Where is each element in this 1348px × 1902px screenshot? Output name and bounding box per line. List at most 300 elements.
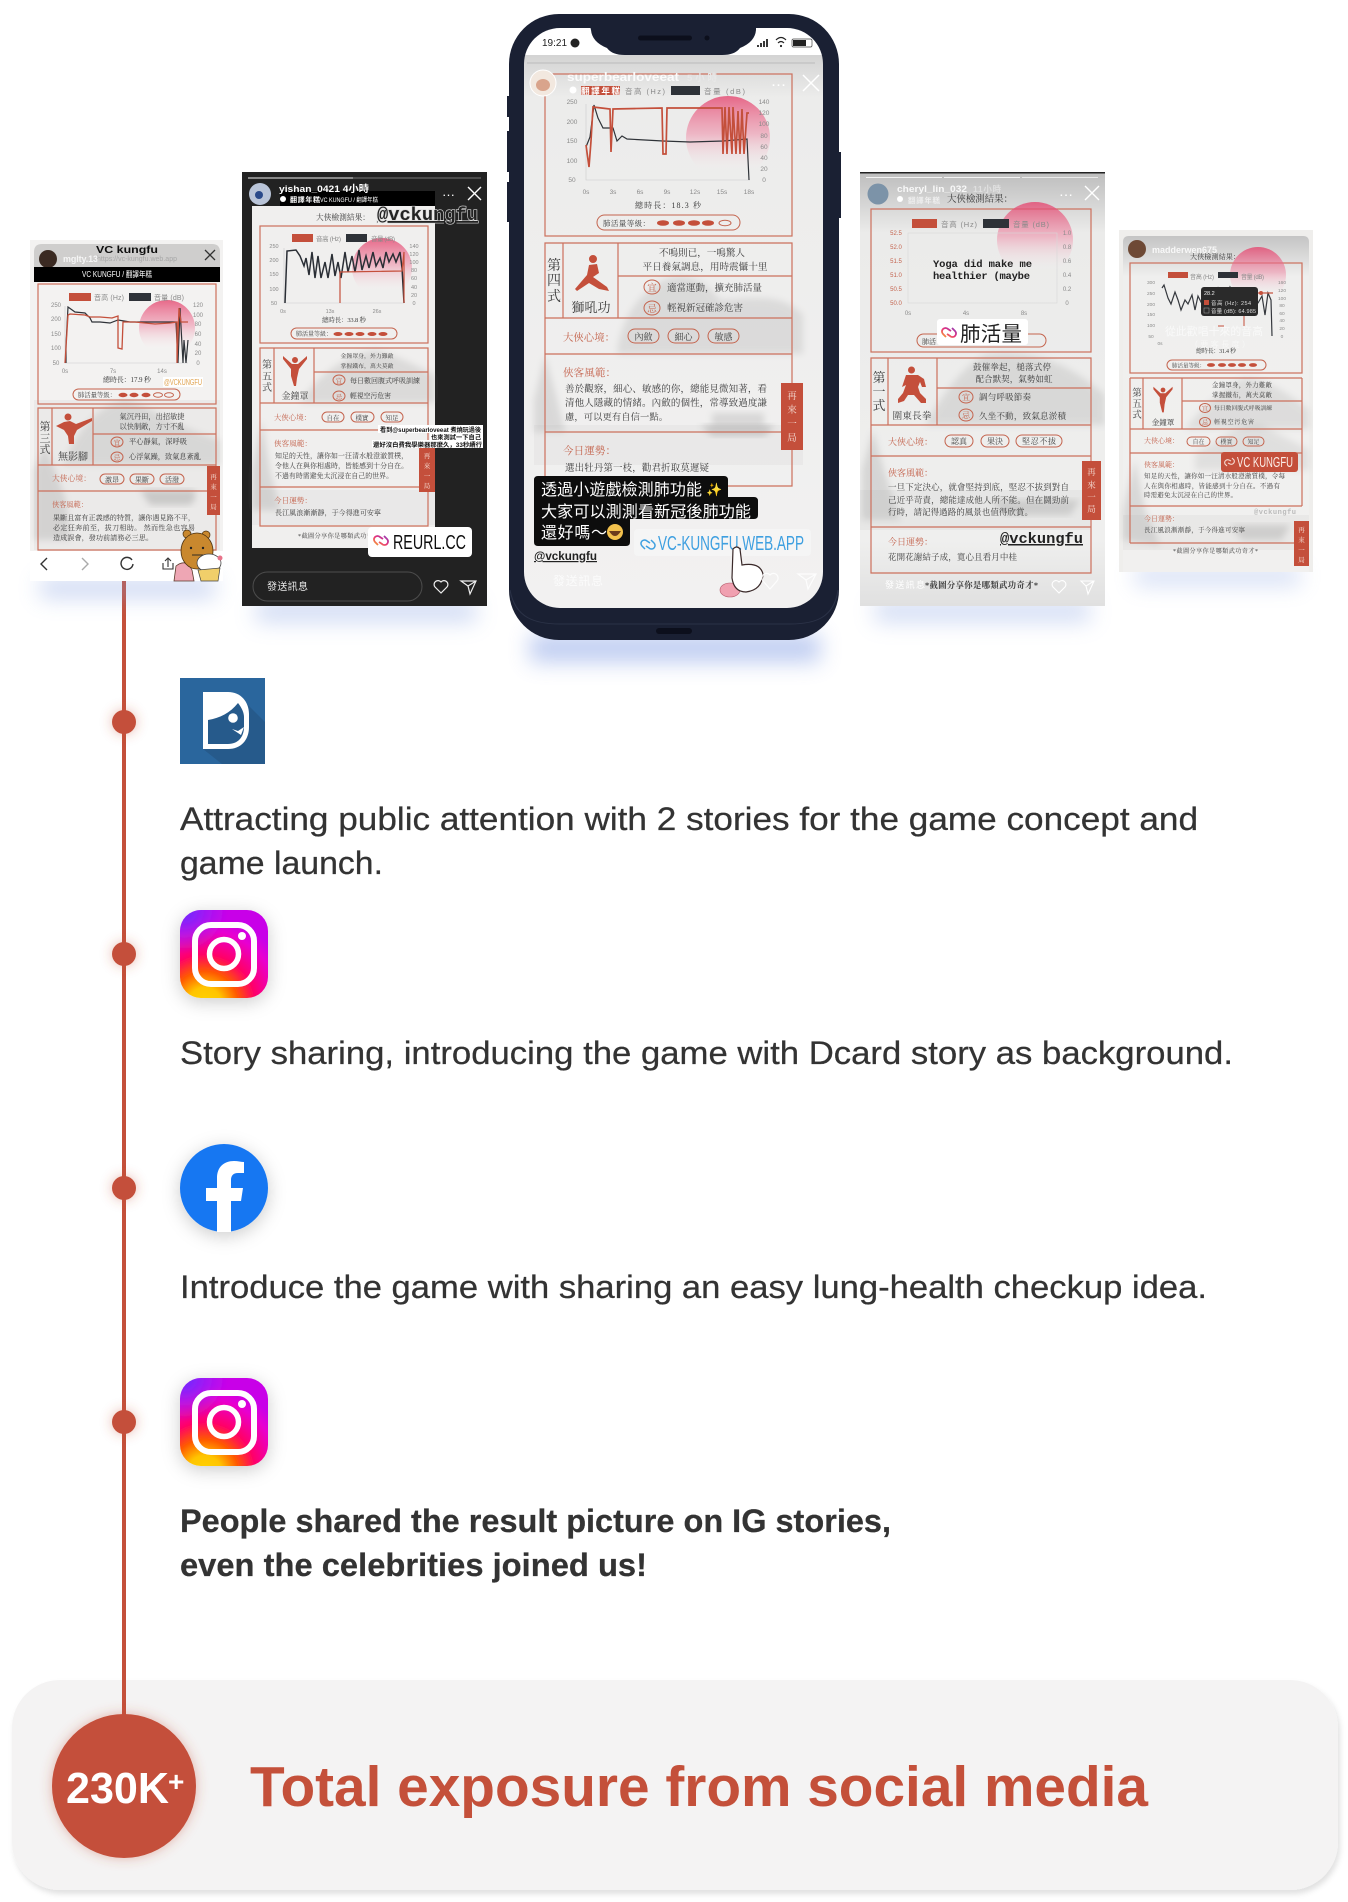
panel: story screenshot 4: 翻譯年糕 [908, 195, 940, 205]
panel: story screenshot 5: 從此歡唱十來的音高 [1165, 324, 1263, 338]
panel: story screenshot 1: 200 [51, 317, 62, 323]
phone status bar: 19:21 [542, 38, 567, 49]
panel: story screenshot 2: @vckungfu [377, 206, 478, 226]
story caption sticker: 透過小遊戲檢測肺功能 [541, 481, 702, 499]
panel: story screenshot 4: 行時，請記得過路的風景也值得欣賞。 [888, 507, 1033, 518]
phone screen: story: 輕視新冠確診危害 [667, 302, 743, 314]
panel: story screenshot 1: VC kungfu [96, 245, 158, 256]
panel: story screenshot 1: 7s [110, 369, 116, 375]
panel: story screenshot 5: 五 [1132, 399, 1142, 410]
panel: story screenshot 2: 來 [424, 461, 431, 470]
phone screen: story: 第 [547, 258, 561, 274]
panel: story screenshot 5: 肺活量等級： [1172, 362, 1205, 370]
phone screen: story: 150 [567, 138, 578, 145]
phone screen: story: 0 [762, 177, 766, 184]
phone screen: story: 18s [744, 189, 755, 196]
panel: story screenshot 4: 配合默契，氣勢如虹 [976, 374, 1053, 385]
phone screen: story: 翻譯年糕 [581, 86, 620, 96]
panel: story screenshot 2: 自在 [326, 413, 340, 422]
panel: story screenshot 5: 輕視空污危害 [1214, 418, 1254, 426]
panel: story screenshot 5: 100 [1147, 323, 1155, 329]
panel: story screenshot 2 [242, 172, 487, 622]
panel: story screenshot 2: 140 [409, 244, 419, 250]
panel: story screenshot 4: 52.5 [890, 231, 902, 237]
panel: story screenshot 4: 發送訊息 [885, 579, 925, 590]
panel: total exposure banner [12, 1680, 1338, 1890]
panel: story screenshot 5: 忌 [1202, 418, 1209, 426]
panel: story screenshot 1: 80 [195, 322, 202, 328]
panel: story screenshot 2: 掌握鐵布，萬夫莫敵 [340, 362, 394, 370]
panel: story screenshot 4: 11小時 [973, 184, 1001, 194]
panel: story screenshot 4: 今日運勢： [888, 536, 933, 547]
panel: story screenshot 2: 宜 [336, 376, 343, 385]
panel: story screenshot 2: 俠客風範： [274, 438, 312, 448]
panel: story screenshot 5: *截圖分享你是哪類武功奇才* [1173, 547, 1258, 555]
panel: story screenshot 1: 宜 [114, 438, 120, 447]
panel: story screenshot 4: 肺活 [922, 337, 936, 346]
phone screen: story: 來 [787, 404, 797, 416]
panel: story screenshot 1: 20 [195, 351, 202, 357]
panel: story screenshot 4: 式 [872, 398, 886, 413]
panel: story screenshot 5: 宜 [1202, 404, 1208, 412]
panel: story screenshot 1: VC KUNGFU / 翻譯年糕 [82, 269, 152, 279]
panel: story screenshot 1: 總時長：17.9 秒 [103, 375, 152, 384]
panel: story screenshot 1: 250 [51, 303, 62, 309]
panel: story screenshot 2: 金鐘罩 [281, 390, 309, 401]
panel: story screenshot 5: 式 [1132, 409, 1142, 421]
panel: story screenshot 5: 音高 (Hz) [1190, 273, 1214, 281]
panel: story screenshot 1: 音量 (dB) [154, 293, 184, 302]
panel: story screenshot 2: 每日數回腹式呼吸訓練 [350, 376, 420, 385]
panel: story screenshot 1: https://vc-kungfu.web.app [97, 256, 177, 263]
phone screen: story: 40 [760, 155, 768, 162]
panel: story screenshot 1: 三 [40, 432, 50, 445]
panel: story screenshot 5: 0s [1157, 341, 1163, 347]
panel: story screenshot 1: 來 [210, 482, 217, 491]
panel: story screenshot 2: 0s [280, 309, 286, 315]
link sticker: VC-KUNGFU.WEB.APP [658, 533, 804, 555]
chart tooltip: 28.2 [1204, 291, 1215, 297]
panel: story screenshot 4: 再 [1087, 467, 1096, 477]
panel: story screenshot 2: 輕視空污危害 [350, 391, 391, 400]
panel: story screenshot 5: 300 [1147, 280, 1155, 286]
badge: 230K+ [52, 1714, 196, 1858]
link sticker [640, 536, 804, 550]
phone screen: story: @vckungfu [534, 549, 597, 563]
panel: story screenshot 4: @vckungfu [1000, 531, 1083, 548]
panel: story screenshot 2: 250 [269, 244, 279, 250]
panel: story screenshot 4: 己近乎苛責，總能達成他人所不能。但在鬪勁前 [888, 495, 1069, 506]
phone screen: story: 細心 [674, 331, 693, 342]
phone screen: story: superbearloveeat [567, 72, 679, 84]
panel: central phone mockup [507, 14, 841, 662]
phone screen: story: 發送訊息 [553, 573, 603, 588]
phone screen: story: 四 [547, 273, 561, 289]
panel: story screenshot 2: REURL.CC [393, 532, 466, 554]
panel: story screenshot 5: 音量 (dB) [1241, 273, 1264, 281]
phone screen: story: 總時長：18.3 秒 [635, 200, 702, 210]
panel: story screenshot 2: 總時長：33.8 秒 [322, 315, 366, 324]
phone screen: story: 俠客風範： [563, 366, 616, 379]
panel: story screenshot 4: 來 [1087, 480, 1096, 490]
panel: story screenshot 5: 150 [1147, 312, 1155, 318]
phone screen: story: 獅吼功 [571, 300, 611, 315]
panel: story screenshot 5: 再 [1298, 526, 1305, 534]
panel: story screenshot 5: 金鐘罩身，外力難敵 [1212, 380, 1272, 389]
panel: story screenshot 5: 人在與你相處時，皆能感到十分自在。不過有 [1144, 481, 1280, 490]
phone screen: story: 敏感 [714, 331, 733, 342]
panel: story screenshot 2: 知足 [386, 413, 399, 422]
story caption sticker [534, 476, 758, 546]
phone screen: story: 清他人隱藏的情緒。內斂的個性，常導致過度謙 [565, 397, 767, 409]
panel: story screenshot 4: 花開花謝結子成，寬心且看月中桂 [888, 552, 1017, 563]
chart tooltip: 音高 (Hz): 254 [1211, 299, 1251, 307]
heading: total exposure: Total exposure from social media [250, 1755, 1149, 1819]
panel: story screenshot 2: 肺活量等級： [296, 330, 332, 338]
panel: story screenshot 2: 知足的天性，讓你如一汪清水般澄澈質樸， [275, 451, 408, 461]
panel: story screenshot 1: 局 [210, 503, 217, 511]
panel: story screenshot 1: 100 [51, 346, 62, 352]
panel: story screenshot 5: 局 [1298, 556, 1305, 564]
phone screen: story: 12s [690, 189, 701, 196]
phone body [507, 14, 841, 640]
phone screen: story: 音高 (Hz) [625, 86, 666, 96]
panel: story screenshot 4: 調勻呼吸節奏 [979, 392, 1031, 402]
panel: story screenshot 2: 令他人在與你相處時，皆能感到十分自在。 [275, 461, 408, 471]
panel: story screenshot 4: 一 [872, 384, 886, 399]
phone screen: story: 250 [567, 99, 578, 106]
phone screen: story: 15s [717, 189, 728, 196]
panel: story screenshot 4: 0 [1065, 301, 1069, 307]
panel: story screenshot 1: 造成誤會，發功前請務必三思。 [53, 533, 153, 543]
panel: story screenshot 2: 100 [269, 287, 279, 293]
panel: story screenshot 5: （要客長度） [1190, 339, 1250, 349]
panel: story screenshot 2: 再 [424, 452, 431, 460]
panel: story screenshot 4: 一旦下定決心，就會堅持到底，堅忍不拔到對自 [888, 482, 1069, 493]
panel: story screenshot 5: 40 [1279, 318, 1285, 324]
panel: story screenshot 5: 知足 [1247, 438, 1260, 446]
panel: story screenshot 4: 8s [1021, 311, 1027, 317]
phone screen: story: 忌 [647, 304, 657, 315]
phone screen: story: 100 [567, 158, 578, 165]
panel: story screenshot 2: 大俠心境： [274, 413, 311, 422]
text: Dcard description: game launch. [180, 845, 383, 881]
phone screen: story: 再 [787, 391, 797, 402]
panel: story screenshot 1 [30, 240, 223, 598]
phone screen: story: 80 [760, 133, 768, 140]
panel: story screenshot 1: 心浮氣躁，致氣息紊亂 [129, 452, 201, 462]
panel: story screenshot 1: 60 [195, 332, 202, 338]
phone screen: story: 慮，可以更有自信一點。 [565, 411, 668, 423]
phone screen: story: 一 [787, 420, 797, 430]
text: Instagram story description: Story sharing, introducing the game with Dcard story as background. [180, 1035, 1233, 1071]
timeline dot 1 [112, 710, 136, 734]
panel: story screenshot 4: 1.0 [1063, 231, 1072, 237]
phone screen: story: 200 [567, 119, 578, 126]
panel: story screenshot 2: yishan_0421 4小時 [279, 183, 370, 195]
panel: story screenshot 2: 長江風浪漸漸靜，于今得進可安寧 [275, 508, 381, 518]
panel: story screenshot 4: 50.0 [890, 301, 902, 307]
phone screen: story: 120 [759, 110, 770, 117]
panel: story screenshot 5: 60 [1279, 311, 1285, 317]
icon: pointing hand sticker [720, 547, 763, 597]
panel: story screenshot 5: 0 [1281, 334, 1284, 340]
panel: story screenshot 5: 大俠檢測結果： [1190, 252, 1240, 261]
panel: story screenshot 1: 果斷且富有正義感的特質，讓你遇見路不平， [53, 513, 195, 523]
panel: story screenshot 1: 以快制敵，方寸不亂 [120, 422, 184, 432]
badge: 230K+: + [168, 1766, 184, 1797]
panel: story screenshot 4: 音量 (dB) [1013, 219, 1050, 229]
panel: story screenshot 4: 51.5 [890, 259, 902, 265]
panel: story screenshot 1: 肺活量等級： [78, 390, 116, 399]
story caption sticker: 還好嗎～ [541, 524, 607, 542]
timeline dot 3 [112, 1176, 136, 1200]
text: Dcard description: Attracting public attention with 2 stories for the game concept and [180, 801, 1198, 837]
panel: story screenshot 5: 時需避免太沉浸在自己的世界。 [1144, 490, 1237, 499]
panel: story screenshot 2: 音高 (Hz) [316, 234, 341, 243]
panel: story screenshot 4: 0.6 [1063, 259, 1072, 265]
panel: story screenshot 2: 0 [412, 301, 416, 307]
chart tooltip [1201, 287, 1258, 316]
panel: story screenshot 2: 金鐘罩身，外力難敵 [340, 352, 394, 360]
text: shared results description [180, 1503, 891, 1583]
panel: story screenshot 4: 圍東長拳 [892, 409, 932, 422]
panel: story screenshot 2: 40 [411, 285, 417, 291]
story caption sticker: ✨ [706, 482, 722, 498]
panel: story screenshot 4 [860, 172, 1105, 622]
panel: story screenshot 5: 160 [1278, 280, 1286, 286]
panel: story screenshot 2: *截圖分享你是哪類武功奇才* [298, 532, 383, 540]
panel: story screenshot 2: 大俠檢測結果： [316, 212, 370, 222]
panel: story screenshot 4: 肺活量 [960, 323, 1022, 346]
panel: story screenshot 4: 俠客風範： [888, 467, 933, 478]
phone screen: story: 式 [547, 289, 561, 305]
panel: story screenshot 4: Yoga did make me [933, 259, 1032, 271]
phone screen: story [524, 28, 823, 608]
text: Facebook description: Introduce the game with sharing an easy lung-health checkup idea. [180, 1269, 1207, 1305]
phone notch [590, 26, 756, 55]
panel: story screenshot 4: 0s [905, 311, 911, 317]
panel: story screenshot 4: 0.2 [1063, 287, 1072, 293]
panel: story screenshot 2: 五 [262, 371, 272, 383]
panel: story screenshot 4: 音高 (Hz) [941, 219, 978, 229]
panel: story screenshot 5: 俠客風範： [1144, 460, 1179, 469]
phone screen: story: 肺活量等級： [603, 218, 650, 228]
panel: story screenshot 1: @VCKUNGFU [164, 378, 202, 387]
timeline line [122, 581, 126, 1721]
panel: story screenshot 4: 50.5 [890, 287, 902, 293]
panel: story screenshot 1: 式 [40, 442, 50, 456]
panel: story screenshot 1: 0s [62, 369, 68, 375]
panel: story screenshot 5: 樸實 [1220, 438, 1233, 446]
panel: story screenshot 4: healthier (maybe [933, 271, 1030, 283]
panel: story screenshot 2: 不過有時需避免太沉浸在自己的世界。 [275, 471, 393, 480]
panel: story screenshot 2: 式 [262, 381, 272, 394]
panel: story screenshot 4: 0.4 [1063, 273, 1072, 279]
panel: story screenshot 5: 今日運勢： [1144, 514, 1179, 523]
panel: story screenshot 5: 自在 [1192, 438, 1205, 446]
panel: story screenshot 1: 0 [196, 361, 200, 367]
panel: story screenshot 2: 樸實 [356, 413, 369, 422]
phone status bar [524, 28, 823, 55]
panel: story screenshot 1: 120 [193, 303, 204, 309]
panel: story screenshot 4: 52.0 [890, 245, 902, 251]
text: shared results description: even the celebrities joined us! [180, 1547, 647, 1583]
panel: story screenshot 1: mglty.13 [63, 254, 98, 264]
panel: story screenshot 1: 一 [210, 494, 217, 501]
panel: story screenshot 1: 活潑 [165, 475, 179, 484]
panel: story screenshot 2: 120 [409, 252, 419, 258]
text: shared results description: People shared the result picture on IG stories, [180, 1503, 891, 1539]
panel: story screenshot 5: 100 [1278, 296, 1286, 302]
panel: story screenshot 2: 也來測試一下自己 [431, 434, 481, 442]
text: Dcard description [180, 801, 1198, 881]
panel: story screenshot 2: 發送訊息 [267, 580, 308, 593]
phone screen: story: 選出牡丹第一枝，勸君折取莫遲疑 [565, 462, 709, 474]
panel: story screenshot 4: 大俠心境： [888, 436, 933, 447]
panel: story screenshot 2: 100 [409, 260, 419, 266]
panel: story screenshot 2: 翻譯年糕 [290, 195, 320, 204]
panel: story screenshot 1: 無影腳 [58, 450, 88, 463]
panel: story screenshot 5: 120 [1278, 288, 1286, 294]
panel: story screenshot 5: 金鐘罩 [1152, 417, 1175, 427]
panel: story screenshot 5: 知足的天性，讓你如一汪清水般澄澈質樸，令每 [1144, 471, 1286, 480]
panel: story screenshot 1: 再 [210, 473, 217, 481]
panel: story screenshot 1: 150 [51, 332, 62, 338]
panel: story screenshot 4: ... [1060, 188, 1072, 199]
panel: story screenshot 2: 20 [411, 293, 417, 299]
badge: 230K+: 230K [66, 1764, 169, 1813]
panel: story screenshot 1: 100 [193, 313, 204, 319]
phone screen: story: 140 [759, 99, 770, 106]
panel: story screenshot 2: VC KUNGFU / 翻譯年糕 [320, 196, 378, 204]
phone screen: story: 音量 (dB) [704, 86, 746, 96]
panel: story screenshot 2: 150 [269, 272, 279, 278]
phone screen: story: 今日運勢： [563, 444, 616, 457]
panel: story screenshot 5: 20 [1279, 326, 1285, 332]
phone screen: story: ... [772, 77, 785, 89]
panel: story screenshot 5: @vckungfu [1254, 509, 1296, 517]
panel: story screenshot 1: 激昂 [105, 475, 119, 484]
panel: story screenshot 1: 必定狂奔前至，拔刀相助。 然而性急也容易 [53, 523, 195, 533]
panel: story screenshot 1: 音高 (Hz) [94, 293, 124, 302]
panel: story screenshot 2: 50 [271, 301, 277, 307]
panel: story screenshot 5: 第 [1132, 387, 1142, 399]
panel: story screenshot 1: 果斷 [135, 475, 149, 484]
phone screen: story: 60 [760, 144, 768, 151]
phone screen: story: 9s [664, 189, 671, 196]
panel: story screenshot 5: 長江風浪漸漸靜，于今得進可安寧 [1144, 525, 1246, 534]
panel: story screenshot 4: *截圖分享你是哪類武功奇才* [925, 580, 1038, 590]
panel: story screenshot 5: 總時長：31.4 秒 [1196, 347, 1237, 355]
panel: story screenshot 4: 果決 [987, 436, 1003, 446]
panel: story screenshot 2: ... [443, 188, 454, 198]
panel: story screenshot 2: 60 [411, 276, 417, 282]
icon: Facebook [180, 1144, 268, 1232]
panel: story screenshot 1: 平心靜氣，深呼吸 [129, 437, 187, 447]
panel: story screenshot 5: 250 [1147, 291, 1155, 297]
phone screen: story: 0s [583, 189, 590, 196]
phone screen: story: 善於觀察，細心、敏感的你，總能見微知著，看 [565, 383, 767, 395]
panel: story screenshot 4: 鼓催拳起，槌落式停 [973, 362, 1051, 373]
panel: story screenshot 5: madderwen675 [1152, 245, 1217, 255]
icon: Dcard [180, 678, 265, 764]
phone screen: story: 局 [787, 433, 797, 444]
panel: story screenshot 4: 認真 [951, 436, 968, 446]
phone screen: story: 內斂 [634, 331, 653, 342]
panel: story screenshot 1: 50 [53, 361, 60, 367]
phone screen: story: 50 [568, 177, 576, 184]
phone screen: story: 100 [759, 121, 770, 128]
timeline dot 4 [112, 1410, 136, 1434]
panel: story screenshot 2: 一 [424, 473, 431, 480]
panel: story screenshot 4: 久坐不動，致氣息淤積 [979, 411, 1067, 422]
panel: story screenshot 4: 宜 [962, 392, 970, 402]
icon: Instagram second [180, 1378, 268, 1466]
panel: story screenshot 4: 第 [872, 370, 886, 385]
icon: Instagram [180, 910, 268, 998]
panel: story screenshot 4: 51.0 [890, 273, 902, 279]
panel: story screenshot 1: 40 [195, 342, 202, 348]
panel: story screenshot 5: 掌握鐵布，萬夫莫敵 [1212, 390, 1272, 399]
panel: story screenshot 2: 看到@superbearloveeat 煮燒玩過後 [380, 426, 482, 434]
phone screen: story: 適當運動，擴充肺活量 [667, 282, 762, 294]
phone screen: story: 6s [637, 189, 644, 196]
panel: story screenshot 1: 俠客風範： [52, 500, 88, 509]
icon: kakao friends sticker [174, 530, 222, 581]
timeline dot 2 [112, 942, 136, 966]
phone screen: story: 20 [760, 166, 768, 173]
panel: story screenshot 4: 堅忍不拔 [1022, 436, 1056, 446]
panel: story screenshot 4: cheryl_lin_032 [897, 184, 967, 195]
panel: story screenshot 4: 0.8 [1063, 245, 1072, 251]
panel: story screenshot 5: 大俠心境： [1144, 436, 1179, 445]
panel: story screenshot 2: 音量 (dB) [371, 234, 395, 243]
panel: story screenshot 5 [1119, 230, 1313, 586]
panel: story screenshot 5: 來 [1298, 535, 1305, 544]
panel: story screenshot 2: 今日運勢： [274, 495, 312, 505]
panel: story screenshot 1: 大俠心境： [52, 473, 91, 483]
panel: story screenshot 1: 第 [40, 420, 50, 433]
panel: story screenshot 4: 4s [963, 311, 969, 317]
panel: story screenshot 2: 80 [411, 268, 417, 274]
panel: story screenshot 5: VC KUNGFU [1237, 454, 1293, 471]
panel: story screenshot 5: 一 [1298, 547, 1305, 554]
phone screen: story: 不鳴則已，一鳴驚人 [659, 247, 745, 259]
phone screen: story: 大俠心境： [563, 331, 615, 344]
panel: story screenshot 5: 80 [1279, 303, 1285, 309]
phone screen: story: 平日養氣調息，用時震懾十里 [642, 261, 768, 273]
panel: story screenshot 5: 200 [1147, 302, 1155, 308]
panel: story screenshot 2: 局 [424, 482, 431, 490]
panel: story screenshot 1: 氣沉丹田，出招敏捷 [120, 412, 184, 422]
phone screen: story: 宜 [647, 282, 657, 294]
panel: story screenshot 4: 局 [1087, 504, 1096, 514]
panel: story screenshot 5: 50 [1148, 334, 1154, 340]
panel: story screenshot 2: 忌 [336, 392, 343, 401]
panel: story screenshot 1: 14s [157, 369, 167, 375]
panel: story screenshot 4: 一 [1087, 492, 1096, 502]
panel: story screenshot 4: 忌 [962, 411, 971, 420]
story caption sticker: 大家可以測測看新冠後肺功能 [541, 503, 751, 521]
panel: story screenshot 5: 每日數回腹式呼吸訓練 [1214, 404, 1272, 412]
chart tooltip: 音量 (dB): 64.985 [1211, 307, 1256, 315]
panel: story screenshot 4: 大俠檢測結果： [947, 193, 1013, 205]
phone screen: story: 5小時 [687, 72, 717, 84]
panel: story screenshot 2: 26s [373, 309, 382, 315]
panel: story screenshot 2: 第 [262, 358, 272, 371]
phone screen: story: 3s [610, 189, 617, 196]
